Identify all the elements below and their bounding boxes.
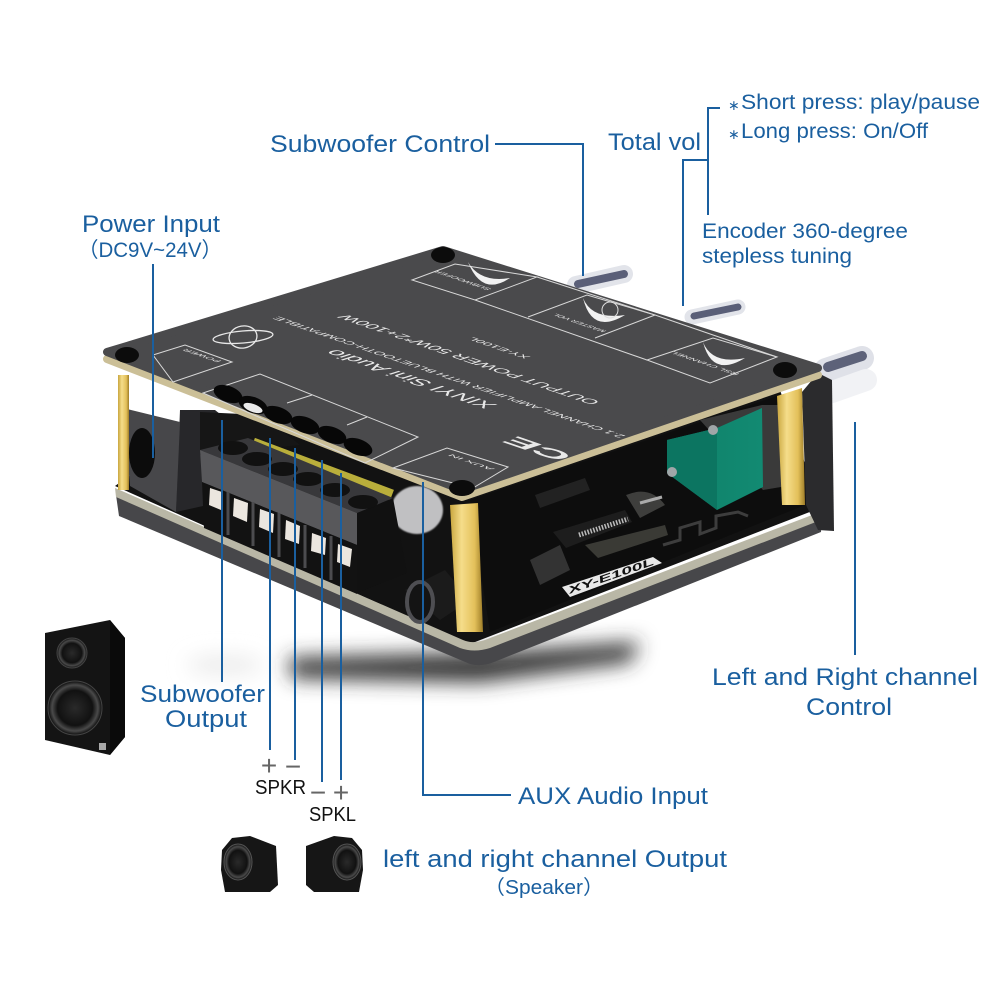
plate text: SUBWOOFER <box>431 270 494 291</box>
label: SPKR polarity <box>255 750 306 799</box>
label: SPKL polarity: SPKL <box>309 804 356 826</box>
label: encoder <box>702 220 908 268</box>
plate text: CE <box>495 434 581 463</box>
label: SPKR polarity: + <box>261 750 277 781</box>
plate text: XY-E100L <box>465 336 533 359</box>
amplifier board <box>107 247 866 665</box>
speaker holes <box>211 381 375 460</box>
gold standoffs <box>118 375 805 632</box>
model label <box>562 557 662 597</box>
screws <box>115 247 797 496</box>
terminal screws <box>218 441 378 509</box>
label: SPKL polarity: − <box>310 777 326 808</box>
label: subwoofer control: Subwoofer Control <box>270 131 490 158</box>
label: SPKL polarity: + <box>333 777 349 808</box>
terminal contacts <box>209 488 352 567</box>
inductor <box>253 443 392 495</box>
label: speaker output: （Speaker） <box>484 876 604 899</box>
plate text: AUX IN <box>445 453 497 471</box>
plate text: OUTPUT POWER 50W*2+100W <box>334 313 604 406</box>
label: encoder: stepless tuning <box>702 245 852 268</box>
PCB component area <box>470 395 805 632</box>
label: subwoofer output: Output <box>165 706 247 733</box>
label: long press: Long press: On/Off <box>741 120 928 143</box>
plate text: RSL CHANNEL <box>668 350 742 376</box>
label: AUX audio input: AUX Audio Input <box>518 783 708 810</box>
plate text: XINYI Sini Audio <box>319 348 502 410</box>
label: left and right channel control: Left and Right channel <box>712 664 978 691</box>
DC jack <box>123 408 300 512</box>
capacitor <box>391 486 443 534</box>
label: left and right channel control <box>712 664 978 721</box>
label: power input: Power Input <box>82 211 220 238</box>
top plate <box>107 247 818 497</box>
antenna traces <box>663 512 748 545</box>
icon: subwoofer speaker <box>45 620 125 755</box>
label: SPKL polarity <box>309 777 356 826</box>
knobs <box>576 274 866 392</box>
label: subwoofer output: Subwoofer <box>140 681 265 708</box>
label: total vol: Total vol <box>608 129 701 156</box>
terminal block <box>200 438 407 594</box>
label: short press: ∗ <box>728 97 740 113</box>
plate text <box>180 270 742 471</box>
leader lines <box>153 108 855 795</box>
icon: left speaker <box>221 836 278 892</box>
shadow under board <box>187 642 640 682</box>
metal bracket <box>802 373 834 531</box>
plate text: POWER <box>180 348 224 363</box>
label: speaker output <box>383 846 727 899</box>
label: long press: ∗ <box>728 126 740 142</box>
label: power input: （DC9V~24V） <box>78 239 222 262</box>
label: SPKR polarity: SPKR <box>255 777 306 799</box>
label: short press: Short press: play/pause <box>741 91 980 114</box>
AUX jack <box>405 570 470 622</box>
model label: XY-E100L <box>568 557 654 597</box>
label: speaker output: left and right channel Output <box>383 846 727 873</box>
label: power input <box>78 211 222 262</box>
icon: right speaker <box>306 836 363 892</box>
lower PCB <box>115 390 822 665</box>
label: subwoofer output <box>140 681 265 733</box>
plate text: 2.1 CHANNEL AMPLIFIER WITH BLUETOOTH-COMPATIBLE <box>271 315 628 438</box>
plate markings <box>153 262 777 488</box>
green potentiometer <box>667 405 793 510</box>
plate text: MASTER VOL <box>550 313 609 333</box>
label: SPKR polarity: − <box>285 751 301 782</box>
label: encoder: Encoder 360-degree <box>702 220 908 243</box>
label: left and right channel control: Control <box>806 694 892 721</box>
atom logo <box>213 324 273 350</box>
